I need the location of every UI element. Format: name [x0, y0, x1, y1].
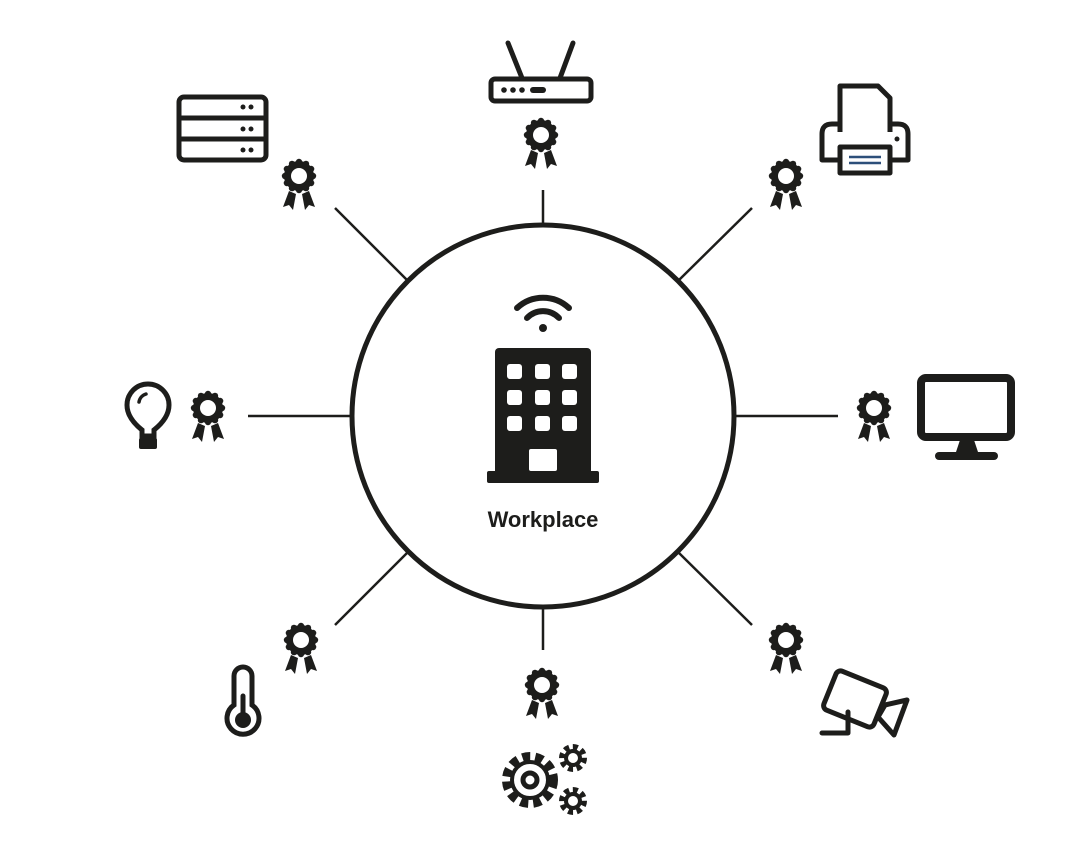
badge: monitor	[857, 391, 891, 442]
badge: thermometer	[284, 623, 318, 674]
icon: building	[487, 348, 599, 483]
icon: router	[491, 43, 591, 101]
label: Workplace: Workplace	[488, 507, 598, 532]
badge: printer	[769, 159, 803, 210]
icon: server	[179, 97, 266, 160]
badge: router	[524, 118, 558, 169]
icon: security camera	[822, 669, 907, 735]
icon: thermometer	[227, 667, 259, 734]
central circle: workplace	[352, 225, 734, 607]
icon: light bulb	[127, 384, 169, 449]
badge: camera	[769, 623, 803, 674]
badge: server	[282, 159, 316, 210]
icon: printer	[822, 86, 908, 173]
icon: wifi	[517, 298, 569, 332]
icon: gears	[509, 749, 582, 810]
badge: gears	[525, 668, 559, 719]
icon: monitor	[921, 378, 1011, 460]
badge: light bulb	[191, 391, 225, 442]
connector lines	[248, 190, 838, 650]
